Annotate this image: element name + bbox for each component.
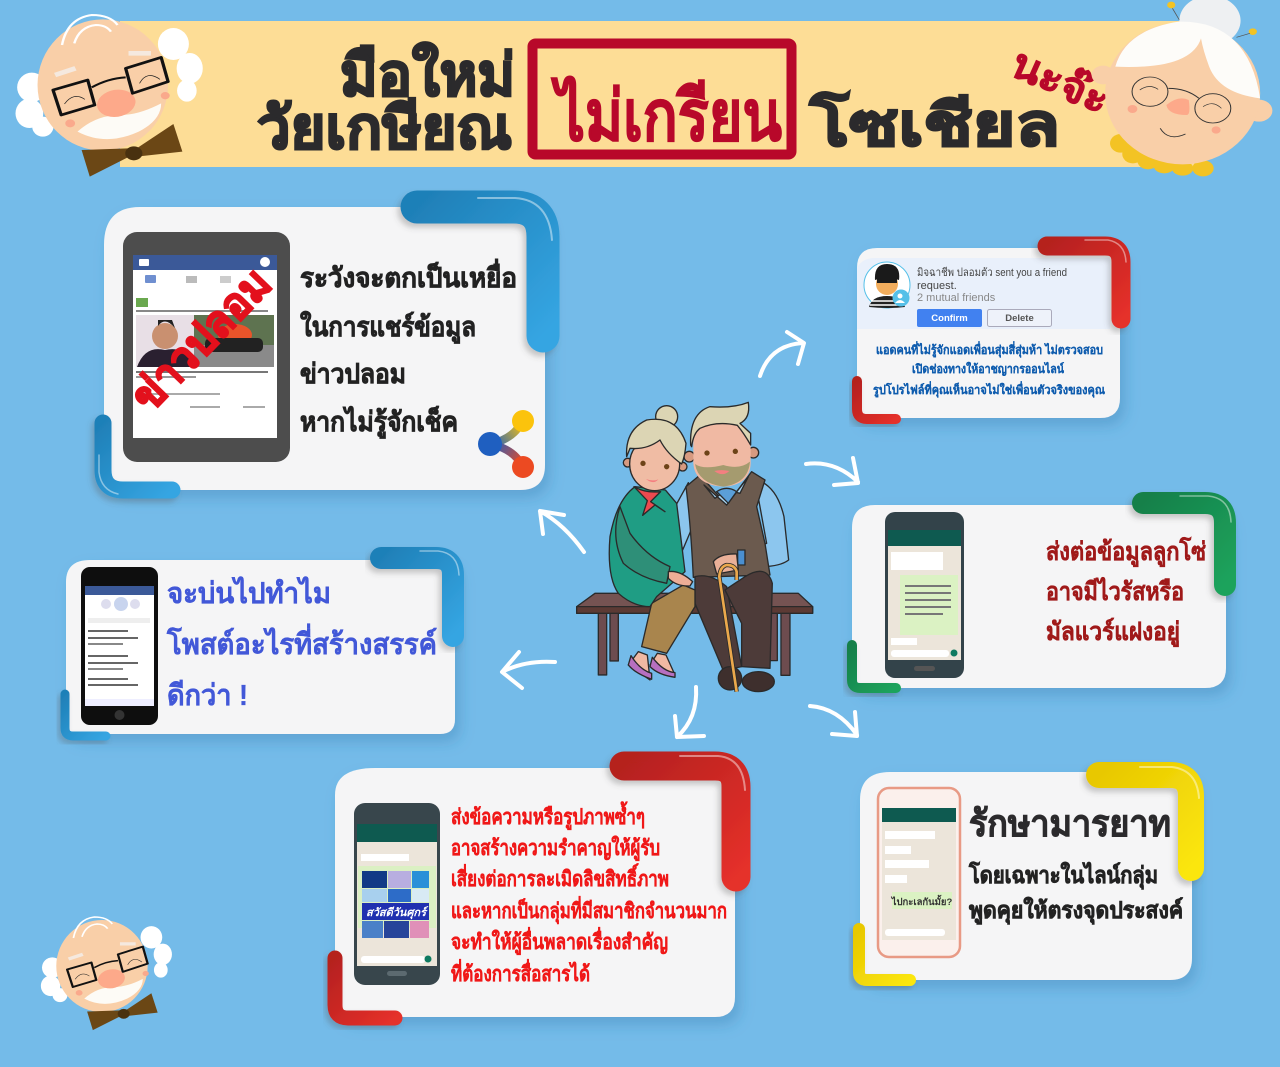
illustration: elderly couple on bench	[577, 402, 813, 692]
title: red stamp box	[532, 44, 792, 155]
grandfather	[673, 402, 789, 692]
manners text	[968, 803, 1183, 925]
phone with feed	[81, 567, 158, 725]
yellow corner bottom left	[859, 929, 910, 980]
icon: grandma head	[1092, 0, 1272, 176]
title banner	[120, 21, 1205, 167]
repeated message text: จะทำให้ผู้อื่นพลาดเรื่องสำคัญ	[451, 926, 668, 956]
repeated message text: อาจสร้างความรำคาญให้ผู้รับ	[451, 835, 660, 862]
chain message text: มัลแวร์แฝงอยู่	[1046, 617, 1180, 648]
panel: don't complain	[65, 551, 459, 736]
arrow: to don't complain	[502, 652, 555, 688]
chain message text: ส่งต่อข้อมูลลูกโซ่	[1046, 536, 1206, 568]
panel: manners	[859, 767, 1199, 980]
warning text: ระวังจะตกเป็นเหยื่อ	[300, 258, 517, 293]
rose gold phone: ไปกะเลกันมั้ย?	[891, 894, 953, 908]
friend request box	[857, 258, 1110, 329]
blue corner top right	[417, 198, 552, 336]
repeated message text	[451, 801, 727, 986]
grandmother	[609, 406, 695, 680]
friend request warning text: แอดคนที่ไม่รู้จักแอดเพื่อนสุ่มสี่สุ่มห้า ไม่ตรวจสอบ	[876, 341, 1103, 358]
chain message text	[1046, 536, 1206, 648]
panel: chain messages	[852, 496, 1231, 688]
red corner bottom left	[335, 958, 395, 1018]
icon: share logo	[478, 410, 534, 478]
panel: friend request scam	[857, 240, 1126, 419]
title: left two lines	[257, 41, 515, 161]
green corner top right	[1143, 496, 1231, 585]
title: red stamp box: ไม่เกรียน	[550, 75, 782, 155]
title: left two lines: วัยเกษียณ	[257, 96, 512, 161]
friend request box: 2 mutual friends	[917, 292, 996, 304]
blue corner top right	[381, 551, 459, 636]
repeated message text: และหากเป็นกลุ่มที่มีสมาชิกจำนวนมาก	[451, 895, 727, 925]
red corner top right	[624, 756, 745, 877]
blue corner bottom left	[65, 694, 106, 736]
phone with image collage	[354, 803, 440, 985]
confirm button: Confirm	[931, 313, 968, 324]
repeated message text: เสี่ยงต่อการละเมิดลิขสิทธิ์ภาพ	[451, 863, 669, 891]
encouragement text: จะบ่นไปทำไม	[167, 576, 331, 610]
green corner bottom left	[852, 645, 896, 688]
title: red flourish: นะจ๊ะ	[1004, 39, 1117, 124]
confirm button	[917, 309, 982, 327]
repeated message text: ส่งข้อความหรือรูปภาพซ้ำๆ	[451, 801, 645, 831]
manners text: โดยเฉพาะในไลน์กลุ่ม	[968, 861, 1158, 890]
arrow: to repeated messages	[675, 687, 704, 737]
title: social: โซเชียล	[809, 90, 1060, 158]
friend request warning text: เปิดช่องทางให้อาชญากรออนไลน์	[912, 361, 1065, 376]
icon: thief avatar	[864, 262, 910, 308]
yellow corner top right	[1099, 767, 1199, 868]
icon: grandpa head	[16, 15, 203, 177]
rose gold phone	[878, 788, 960, 957]
tablet with fake news post	[123, 232, 290, 462]
friend request box: request.	[917, 280, 957, 292]
arrow: to friend request	[760, 332, 804, 376]
delete button	[988, 310, 1052, 326]
warning text: ในการแชร์ข้อมูล	[300, 311, 476, 344]
friend request warning text: รูปโปรไฟล์ที่คุณเห็นอาจไม่ใช่เพื่อนตัวจริงของคุณ	[873, 381, 1105, 398]
title: left two lines: มือใหม่	[340, 41, 515, 108]
arrow: to manners	[810, 706, 857, 736]
phone with chat	[885, 512, 964, 678]
manners text: รักษามารยาท	[969, 803, 1171, 844]
warning text: ข่าวปลอม	[300, 359, 406, 389]
icon: small grandpa	[41, 917, 172, 1030]
arrow: to fake news	[540, 511, 584, 552]
encouragement text	[166, 576, 437, 712]
chain message text: อาจมีไวรัสหรือ	[1046, 576, 1184, 606]
panel: fake news warning	[99, 198, 552, 494]
red corner bottom left	[857, 381, 896, 419]
red corner top right	[1047, 240, 1126, 319]
delete button: Delete	[1005, 313, 1034, 324]
warning text: หากไม่รู้จักเช็ค	[300, 404, 458, 439]
repeated message text: ที่ต้องการสื่อสารได้	[451, 958, 590, 986]
friend request warning text	[873, 341, 1105, 398]
warning text	[300, 258, 517, 439]
phone with image collage: สวัสดีวันศุกร์	[366, 906, 429, 920]
encouragement text: ดีกว่า !	[167, 680, 248, 712]
manners text: พูดคุยให้ตรงจุดประสงค์	[969, 896, 1183, 925]
arrow: to chain messages	[806, 458, 858, 485]
friend request box: มิจฉาชีพ ปลอมตัว sent you a friend	[917, 266, 1067, 279]
encouragement text: โพสต์อะไรที่สร้างสรรค์	[166, 623, 437, 661]
bench	[577, 593, 813, 675]
blue corner bottom left	[99, 423, 172, 494]
panel: repeated messages	[335, 756, 745, 1018]
fake news stamp: ข่าวปลอม	[122, 259, 281, 421]
